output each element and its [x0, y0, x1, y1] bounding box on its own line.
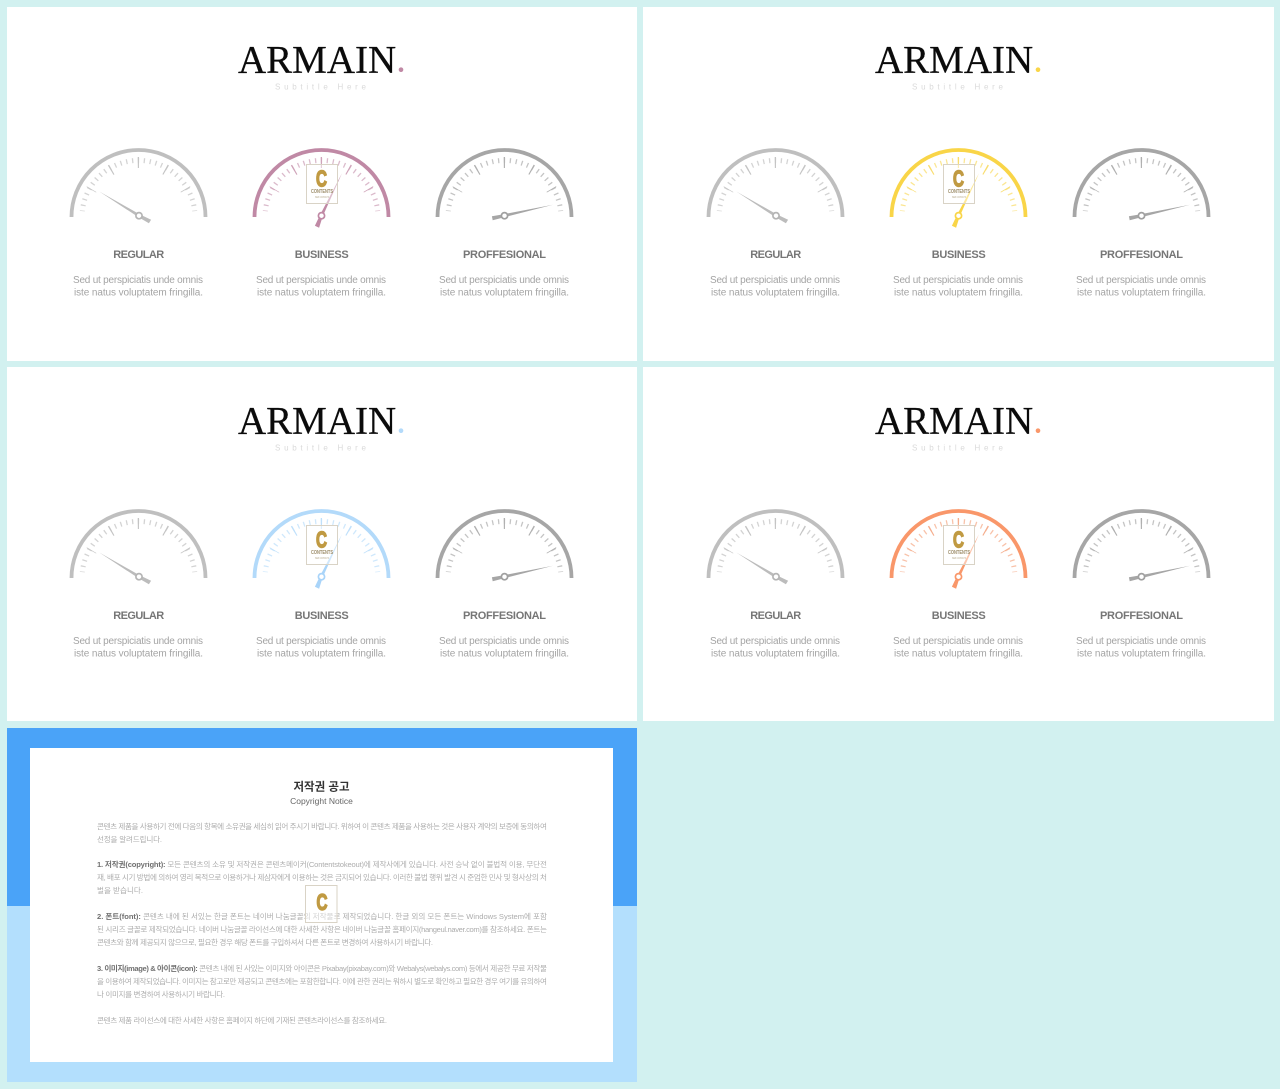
gauge: professional: [438, 150, 572, 220]
gauge: professional: [438, 511, 572, 581]
subtitle: Subtitle Here: [275, 444, 367, 452]
watermark logo: [306, 526, 338, 564]
description: business: iste natus voluptatem fringilla.: [257, 288, 386, 298]
gauge: regular: [708, 511, 842, 584]
description: regular: Sed ut perspiciatis unde omnis: [710, 636, 840, 647]
label: regular: REGULAR: [113, 610, 164, 622]
label: regular: REGULAR: [113, 249, 164, 261]
title: ARMAIN: [875, 38, 1033, 82]
watermark logo: CONTENTS: [311, 550, 333, 556]
notice: font: 콘텐츠와 함께 제공되지 않으므로, 필요한 경우 해당 폰트를 구입하셔서 다른 폰트로 변경하여 사용하시기 바랍니다.: [97, 937, 433, 947]
watermark logo: CONTENTS: [948, 550, 970, 556]
notice: font: [97, 911, 547, 947]
description: business: Sed ut perspiciatis unde omnis: [256, 636, 386, 647]
description: regular: iste natus voluptatem fringilla.: [74, 288, 203, 298]
panel: armain yellow: [643, 7, 1274, 361]
description: regular: [73, 275, 203, 298]
description: professional: iste natus voluptatem fringilla.: [440, 288, 569, 298]
watermark logo: WEB CONTENTS: [952, 195, 966, 199]
title: .: [1033, 398, 1043, 442]
label: business: BUSINESS: [932, 610, 986, 622]
watermark logo: [944, 164, 974, 204]
title: .: [396, 38, 406, 80]
label: professional: PROFFESIONAL: [1100, 610, 1183, 622]
panel: armain orange: [643, 367, 1274, 721]
gauge: business: [892, 150, 1026, 228]
watermark logo: [306, 164, 338, 204]
gauge: professional: [1074, 511, 1208, 581]
label: regular: REGULAR: [750, 249, 801, 261]
watermark logo: C: [316, 889, 328, 915]
label: professional: PROFFESIONAL: [463, 249, 546, 261]
description: business: [256, 636, 386, 660]
description: regular: [710, 275, 840, 298]
description: regular: Sed ut perspiciatis unde omnis: [710, 275, 840, 286]
watermark logo: WEB CONTENTS: [952, 556, 966, 560]
watermark logo: [306, 886, 337, 922]
description: regular: iste natus voluptatem fringilla.: [74, 648, 203, 660]
description: regular: Sed ut perspiciatis unde omnis: [73, 275, 203, 286]
label: business: BUSINESS: [295, 249, 349, 261]
description: professional: iste natus voluptatem fringilla.: [1077, 288, 1206, 298]
description: business: Sed ut perspiciatis unde omnis: [256, 275, 386, 286]
description: professional: iste natus voluptatem fringilla.: [440, 648, 569, 660]
watermark logo: C: [316, 166, 327, 192]
gauge: professional: [1074, 150, 1208, 220]
title: .: [396, 398, 406, 442]
notice: image and icon: 3. 이미지(image) & 아이콘(icon): 콘텐츠 내에 된 사있는 이미지와 아이콘은 Pixabay(pixabay.com)와 Webalys(webalys.com) 등에서 제공한 무료 저작물: [97, 963, 547, 973]
copyright subheading: Copyright Notice: [290, 796, 353, 806]
title: ARMAIN: [238, 400, 396, 442]
subtitle: Subtitle Here: [912, 444, 1004, 452]
gauge: business: [254, 150, 388, 228]
watermark logo: WEB CONTENTS: [315, 556, 329, 560]
notice: copyright: 재, 배포 시기 방법에 의하여 영리 목적으로 이용하거나 제삼자에게 이용하는 것은 금지되어 있습니다. 이러한 불법 행위 발견 시 준엄한 민사 및 형사상의 처: [97, 872, 547, 882]
title: .: [1033, 38, 1043, 80]
notice: image and icon: [97, 963, 547, 999]
description: business: iste natus voluptatem fringilla.: [257, 648, 386, 660]
label: professional: PROFFESIONAL: [1100, 249, 1183, 261]
description: business: Sed ut perspiciatis unde omnis: [893, 275, 1023, 286]
notice: copyright: 1. 저작권(copyright): 모든 콘텐츠의 소유 및 저작권은 콘텐츠메이커(Contentstokeout)에 제작사에게 있습니다. 사전 승낙 없이 불법적 이용, 무단전: [97, 859, 547, 869]
watermark logo: [944, 526, 974, 564]
copyright heading: 저작권 공고: [293, 780, 350, 794]
watermark logo: CONTENTS: [311, 189, 333, 195]
description: business: [256, 275, 386, 298]
gauge: regular: [72, 150, 206, 223]
title: ARMAIN: [875, 400, 1033, 442]
panel: armain blue: [7, 367, 637, 721]
notice intro: 콘텐츠 제품을 사용하기 전에 다음의 항목에 소유권을 세심히 읽어 주시기 바랍니다. 위하여 이 콘텐츠 제품을 사용하는 것은 사용자 계약의 보증에 동의하여: [97, 821, 547, 831]
label: business: BUSINESS: [932, 249, 986, 261]
description: regular: Sed ut perspiciatis unde omnis: [73, 636, 203, 647]
description: business: Sed ut perspiciatis unde omnis: [893, 636, 1023, 647]
description: professional: Sed ut perspiciatis unde omnis: [1076, 636, 1206, 647]
gauge: business: [254, 511, 388, 589]
description: regular: iste natus voluptatem fringilla.: [711, 288, 840, 298]
description: professional: Sed ut perspiciatis unde omnis: [439, 275, 569, 286]
watermark logo: C: [953, 526, 964, 552]
description: professional: Sed ut perspiciatis unde omnis: [1076, 275, 1206, 286]
watermark logo: WEB CONTENTS: [315, 195, 329, 199]
notice: copyright: [97, 859, 547, 895]
description: regular: [73, 636, 203, 660]
description: business: [893, 275, 1023, 298]
gauge: business: [892, 511, 1026, 589]
description: business: iste natus voluptatem fringilla.: [894, 288, 1023, 298]
description: professional: [439, 275, 569, 298]
description: professional: [439, 636, 569, 660]
label: business: BUSINESS: [295, 610, 349, 622]
subtitle: Subtitle Here: [275, 82, 367, 92]
description: professional: [1076, 275, 1206, 298]
notice: font: 된 시리즈 글꼴로 제작되었습니다. 네이버 나눔글꼴 라이선스에 대한 사세한 사항은 네이버 나눔글꼴 홈페이지(hangeul.naver.com)를 참조하세요. 폰트는: [97, 924, 547, 934]
notice: copyright: 벌을 받습니다.: [97, 885, 143, 895]
watermark logo: C: [316, 526, 327, 552]
panel: armain pink: [7, 7, 637, 361]
panel: copyright notice: [7, 728, 637, 1082]
notice: font: 2. 폰트(font): 콘텐츠 내에 된 서있는 한글 폰트는 네이버 나눔글꼴의 저작물로 제작되었습니다. 한글 외의 모든 폰트는 Windows System에 포함: [97, 911, 547, 921]
description: business: [893, 636, 1023, 660]
description: professional: Sed ut perspiciatis unde omnis: [439, 636, 569, 647]
label: professional: PROFFESIONAL: [463, 610, 546, 622]
notice intro: [97, 821, 547, 844]
label: regular: REGULAR: [750, 610, 801, 622]
title: ARMAIN: [238, 38, 396, 82]
watermark logo: C: [953, 166, 964, 192]
description: business: iste natus voluptatem fringilla.: [894, 648, 1023, 660]
gauge: regular: [72, 511, 206, 584]
notice: image and icon: 을 이용하여 제작되었습니다. 이미지는 참고로만 제공되고 콘텐츠에는 포함한합니다. 이에 관한 권리는 워하시 별도로 확인하고 필요한 경우 여기를 유의하여: [97, 976, 547, 986]
watermark logo: CONTENTS: [948, 189, 970, 195]
notice intro: 선정을 알려드립니다.: [97, 834, 162, 844]
description: professional: [1076, 636, 1206, 660]
gauge: regular: [708, 150, 842, 223]
description: professional: iste natus voluptatem fringilla.: [1077, 648, 1206, 660]
description: regular: [710, 636, 840, 660]
notice: image and icon: 나 이미지를 변경하여 사용하시기 바랍니다.: [97, 989, 225, 999]
description: regular: iste natus voluptatem fringilla.: [711, 648, 840, 660]
subtitle: Subtitle Here: [912, 82, 1004, 92]
notice: license: 콘텐츠 제품 라이선스에 대한 사세한 사항은 홈페이지 하단에 기재된 콘텐츠라이선스를 참조하세요.: [97, 1015, 387, 1025]
